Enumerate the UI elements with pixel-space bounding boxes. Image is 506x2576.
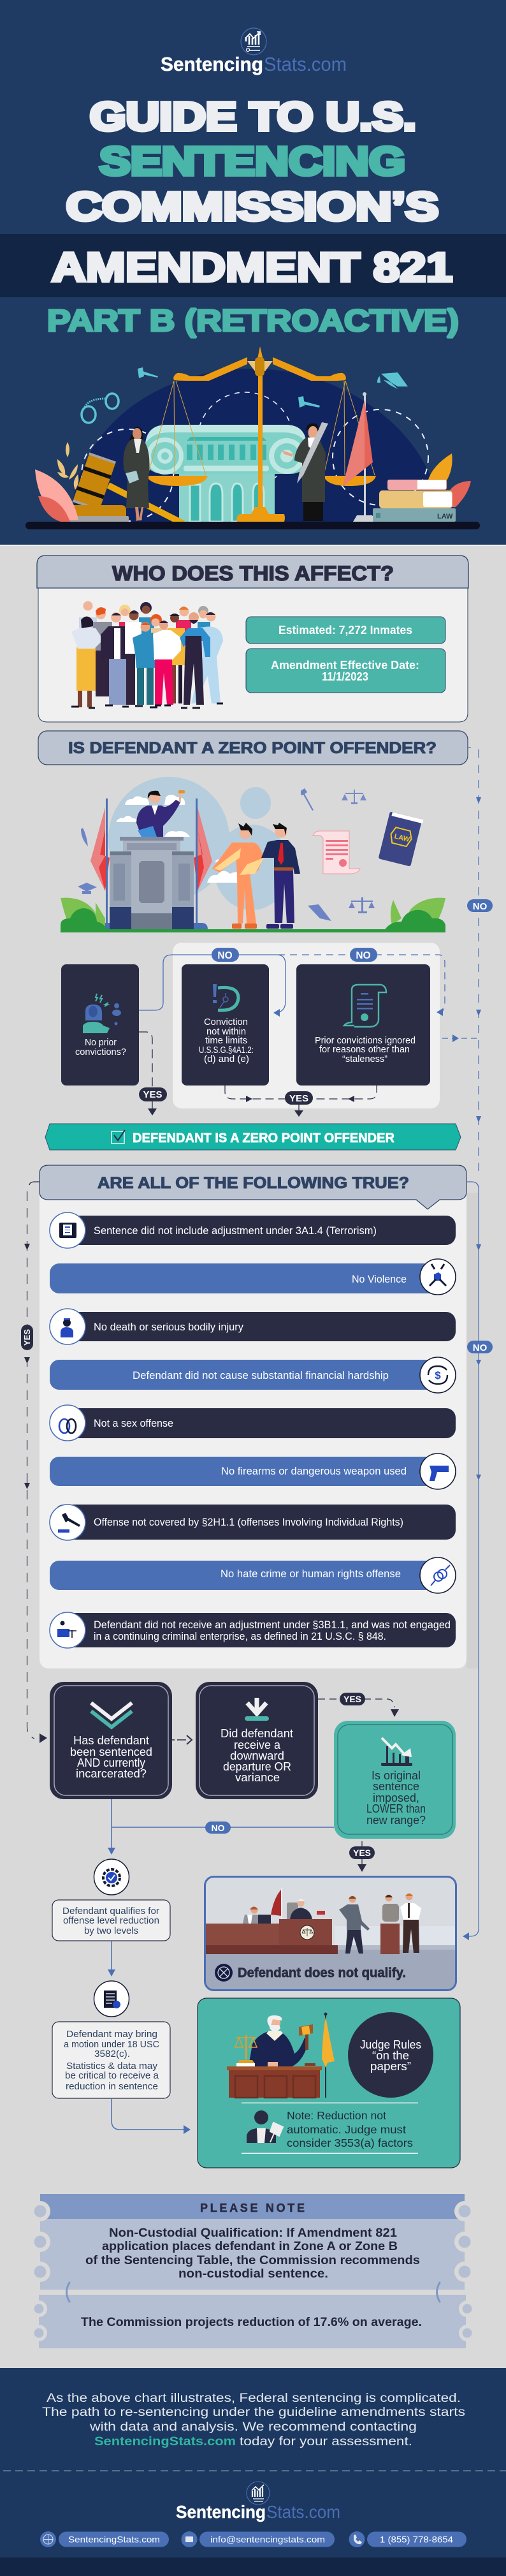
box: qualifies for reduction: offense level reduction [63, 1915, 159, 1926]
row: offense not covered: Offense not covered by §2H1.1 (offenses Involving Individual Rights) [94, 1517, 403, 1528]
flow line: left branch to qualification [108, 1799, 334, 1855]
note text: non-custodial [85, 2226, 420, 2281]
box: motion under 18 USC: Defendant may bring [66, 2029, 157, 2040]
heading: is defendant a zero point offender: IS DEFENDANT A ZERO POINT OFFENDER? [68, 739, 437, 757]
text: incarcerated? [76, 1767, 147, 1780]
icon: handcuffs [82, 394, 119, 423]
closing text: SentencingStats.com [94, 2435, 236, 2448]
card: prior convictions ignored [296, 964, 430, 1086]
text: variance [235, 1771, 280, 1784]
illustration: scales of justice and courthouse column [25, 346, 480, 529]
icon: money cycle: $ [435, 1369, 441, 1381]
icon: signed document [94, 1981, 129, 2017]
figure: guard [261, 823, 300, 929]
logo: SentencingStats top: Sentencing [161, 53, 263, 75]
box: motion under 18 USC: Statistics & data may [66, 2061, 158, 2072]
callout: judge rules: “on the [372, 2049, 409, 2062]
icon: check box [112, 1130, 125, 1144]
stat: effective date: Amendment Effective Date: [271, 659, 419, 672]
arrowheads [273, 1008, 459, 1042]
closing text: The path to re-sentencing under the guideline amendments starts [42, 2406, 465, 2419]
box: qualifies for reduction: Defendant qualifies for [62, 1906, 159, 1917]
icon: gavel [66, 452, 185, 526]
text: Has defendant [73, 1734, 149, 1747]
panel: prior convictions criteria [61, 943, 479, 1117]
card: downward departure [196, 1682, 318, 1799]
note text: projected reduction: The Commission projects reduction of 17.6% on average. [81, 2316, 422, 2329]
card: no prior convictions [61, 964, 139, 1086]
flow line: yes to does not qualify [349, 1841, 375, 1872]
figure: woman lawyer [124, 427, 149, 520]
icon: law books [373, 453, 471, 522]
row: no violence [50, 1259, 456, 1295]
logo: SentencingStats top [161, 28, 347, 75]
badge: yes left: YES [143, 1089, 163, 1100]
box: qualifies for reduction [52, 1900, 170, 1941]
badge: yes vertical [21, 1325, 33, 1350]
figure: judge [136, 790, 185, 837]
icon: falling chart [381, 1738, 412, 1766]
icon: law books: LAW [437, 513, 453, 520]
text [70, 1734, 152, 1780]
title [47, 95, 459, 338]
badge: no: NO [473, 1343, 488, 1353]
badge: no left [212, 948, 239, 962]
illustration: courtroom [206, 1888, 421, 1954]
icon: column [145, 425, 307, 522]
badge: no [467, 899, 493, 912]
note text: non-custodial: Non-Custodial Qualification: If Amendment 821 [109, 2226, 397, 2240]
illustration: courtroom with judge, prisoner and guard [61, 777, 445, 932]
icon: person with thoughts [83, 994, 121, 1033]
icon: document [59, 1223, 76, 1238]
strip behind right flow line [466, 1193, 479, 1668]
row: no death or injury [50, 1309, 456, 1344]
note text: non-custodial: non-custodial sentence. [178, 2267, 328, 2281]
header panel [0, 0, 506, 546]
box: qualifies for reduction: by two levels [84, 1925, 138, 1936]
box: motion under 18 USC: a motion under 18 USC [64, 2039, 159, 2050]
note text: Note: Reduction not [287, 2109, 386, 2122]
row: terrorism: Sentence did not include adjustment under 3A1.4 (Terrorism) [94, 1225, 377, 1237]
text: receive a [234, 1739, 281, 1751]
row: hate crime: No hate crime or human rights offense [220, 1568, 401, 1580]
card: time limits [182, 964, 269, 1086]
row: no death or injury: No death or serious bodily injury [94, 1321, 244, 1333]
row: hate crime [50, 1557, 456, 1593]
icon: person with sign [247, 2110, 283, 2143]
heading: please note: PLEASE NOTE [200, 2202, 305, 2214]
logo: SentencingStats footer: Stats.com [266, 2502, 340, 2522]
contact: phone: 1 (855) 778-8654 [380, 2535, 453, 2545]
row: adjustment and criminal enterprise: Defendant did not receive an adjustment under §3B1.1, and was not engaged [94, 1619, 451, 1631]
note text: automatic. Judge must [287, 2123, 406, 2136]
icon: gavel [58, 1513, 80, 1533]
figure: man lawyer with pen [282, 422, 328, 521]
card: time limits: time limits [205, 1035, 247, 1046]
contact: phone [349, 2531, 466, 2547]
badge: yes vertical: YES [22, 1329, 32, 1346]
icon: graduation cap [377, 372, 408, 389]
icon: gear check [94, 1859, 129, 1895]
icon: clock with alert [213, 984, 238, 1010]
icon: money cycle [428, 1366, 447, 1384]
plants [61, 898, 445, 932]
text: Is original [372, 1769, 421, 1782]
text: sentence [373, 1780, 419, 1793]
card: time limits: U.S.S.G.§4A1.2: [199, 1045, 254, 1056]
badge: no right [350, 948, 377, 962]
icon: law book [379, 811, 423, 867]
icon: judge at bench with scales [57, 1621, 76, 1638]
flow line: no from all true (right side) [463, 1182, 493, 1940]
flow line: yes from all true (left side) [21, 1182, 47, 1743]
icon: down arrow [245, 1698, 269, 1721]
badge: no right: NO [356, 950, 371, 961]
icon: injured person [61, 1318, 73, 1337]
badge: yes center [285, 1091, 313, 1105]
logo: SentencingStats footer: Sentencing [176, 2502, 266, 2522]
text [366, 1769, 426, 1827]
contact: website [40, 2531, 169, 2547]
title: PART B (RETROACTIVE) [47, 304, 459, 338]
card: no prior convictions: convictions? [75, 1047, 126, 1057]
card: sentenced and incarcerated [50, 1682, 172, 1799]
text: AND currently [77, 1756, 145, 1769]
flow line: no from zero point question [467, 747, 493, 1172]
icon: gun [430, 1466, 449, 1481]
note text: non-custodial: of the Sentencing Table, the Commission recommends [85, 2254, 420, 2267]
badge: no [467, 1341, 493, 1353]
text [220, 1727, 293, 1784]
row: terrorism [50, 1212, 456, 1248]
closing text [42, 2392, 465, 2448]
badge: yes: YES [343, 1694, 361, 1704]
callout: judge rules [348, 2012, 433, 2098]
row: firearms: No firearms or dangerous weapon used [221, 1466, 407, 1477]
flow line: yes to banner [152, 1100, 153, 1113]
callout: judge rules: papers” [370, 2060, 411, 2073]
heading [40, 1165, 466, 1209]
contact: website: SentencingStats.com [68, 2535, 160, 2545]
title: COMMISSION’S [66, 185, 438, 229]
icon: small law symbols [78, 788, 375, 921]
text: Did defendant [220, 1727, 293, 1740]
card: prior convictions ignored: for reasons other than [319, 1044, 410, 1055]
heading: ARE ALL OF THE FOLLOWING TRUE? [98, 1174, 409, 1192]
icon: x mark [215, 1964, 233, 1982]
ground bar [25, 522, 480, 529]
icon: scroll [313, 831, 360, 874]
stat: estimated inmates: Estimated: 7,272 Inmates [278, 624, 412, 637]
note text: consider 3553(a) factors [287, 2137, 413, 2149]
closing text: today for your assessment. [240, 2435, 412, 2448]
panel: defendant does not qualify [205, 1876, 456, 1990]
card: prior convictions ignored: “staleness” [342, 1054, 387, 1064]
connector to banner [298, 1104, 300, 1111]
text: downward [230, 1749, 284, 1762]
badge: no: NO [212, 1823, 225, 1833]
box: motion under 18 USC: 3582(c). [94, 2049, 130, 2059]
arrowheads [246, 1096, 354, 1117]
illustration: judge at bench [227, 2013, 335, 2098]
row: financial hardship: Defendant did not cause substantial financial hardship [133, 1370, 389, 1381]
notches [30, 2201, 475, 2341]
card: prior convictions ignored: Prior convictions ignored [315, 1035, 416, 1046]
icon: fist and daggers [430, 1264, 446, 1286]
icon: leaves left [35, 442, 78, 522]
decorative brackets [66, 2283, 440, 2302]
card: no prior convictions: No prior [85, 1037, 117, 1048]
stat: effective date: 11/1/2023 [322, 670, 368, 683]
card: lower than new range [334, 1721, 456, 1839]
text: new range? [366, 1814, 426, 1827]
row: sex offense: Not a sex offense [94, 1418, 173, 1429]
arrowhead [148, 1108, 157, 1115]
row: no violence: No Violence [352, 1274, 407, 1285]
box: motion under 18 USC: be critical to receive a [65, 2070, 159, 2081]
stat: effective date [246, 649, 445, 693]
flow line: no branch dashed [278, 955, 445, 1012]
arrow: to motion [108, 1941, 115, 1976]
box: motion under 18 USC: reduction in sentence [66, 2081, 158, 2092]
heading: is defendant a zero point offender [38, 731, 468, 765]
row: offense not covered [50, 1505, 456, 1540]
text: LOWER than [366, 1802, 426, 1815]
icon: rights symbol [431, 1565, 450, 1586]
row: adjustment and criminal enterprise: in a continuing criminal enterprise, as defined in 21 U.S.C. § 848. [94, 1631, 386, 1642]
contact: email: info@sentencingstats.com [210, 2535, 325, 2545]
footer panel [0, 2368, 506, 2576]
text: imposed, [373, 1792, 419, 1804]
note text: non-custodial: application places defendant in Zone A or Zone B [102, 2240, 398, 2253]
card: time limits: Conviction [204, 1017, 248, 1027]
figure: prisoner [212, 823, 264, 929]
flow line: yes from criteria cards [225, 1086, 377, 1099]
badge: no: NO [473, 901, 488, 912]
row: firearms [50, 1454, 456, 1489]
icon: small gavel right [298, 396, 320, 408]
contact: email [181, 2531, 335, 2547]
panel: are all of the following true [40, 1165, 466, 1668]
banner: defendant is a zero point offender: DEFENDANT IS A ZERO POINT OFFENDER [133, 1131, 394, 1145]
icon: balance scale [147, 346, 376, 522]
text: departure OR [223, 1760, 291, 1773]
flow line: yes branch from no prior convictions [139, 1032, 152, 1087]
title: GUIDE TO U.S. [90, 95, 416, 139]
box: motion under 18 USC [52, 2022, 170, 2098]
banner: defendant is a zero point offender [45, 1124, 461, 1150]
card: time limits: (d) and (e) [204, 1054, 249, 1064]
badge: no [205, 1822, 231, 1834]
badge: yes left [139, 1087, 167, 1101]
illustration: group of people [71, 601, 223, 708]
icon: handcuffs [59, 1419, 76, 1433]
panel: judge rules on the papers [198, 1998, 460, 2168]
panel: who does this affect [37, 556, 468, 722]
icon: flag [343, 392, 377, 522]
flow line: exit to right [442, 1038, 479, 1039]
row: financial hardship [50, 1357, 456, 1393]
logo: SentencingStats footer [176, 2482, 340, 2522]
row: adjustment and criminal enterprise [50, 1612, 456, 1648]
badge: yes center: YES [289, 1093, 308, 1104]
icon: law book: LAW [393, 832, 411, 844]
icon: chevrons [91, 1703, 132, 1719]
icon: podium [110, 837, 194, 929]
arrow: to judge panel [112, 2098, 191, 2134]
heading: WHO DOES THIS AFFECT? [112, 562, 394, 585]
badge: yes: YES [353, 1848, 371, 1858]
arrow: between cards [172, 1735, 192, 1744]
title: SENTENCING [99, 140, 405, 184]
panel: please note [30, 2194, 475, 2348]
stat: estimated inmates [246, 617, 445, 644]
row: sex offense [50, 1405, 456, 1441]
badge: no left: NO [217, 950, 233, 961]
closing text: with data and analysis. We recommend contacting [89, 2420, 417, 2434]
flow line: no branch solid [139, 955, 286, 1012]
title: AMENDMENT 821 [52, 244, 452, 290]
icon: document scroll [344, 985, 386, 1027]
card: time limits: not within [206, 1026, 246, 1037]
note text [287, 2109, 413, 2149]
flow line: yes to sentence question [318, 1693, 399, 1717]
closing text: As the above chart illustrates, Federal sentencing is complicated. [47, 2392, 461, 2405]
icon: small gavel left [138, 367, 158, 378]
panel: defendant does not qualify: Defendant does not qualify. [238, 1966, 406, 1980]
text: been sentenced [70, 1746, 152, 1758]
callout: judge rules: Judge Rules [360, 2038, 421, 2051]
icon: flags [90, 799, 212, 929]
logo: SentencingStats top: Stats.com [264, 53, 347, 75]
